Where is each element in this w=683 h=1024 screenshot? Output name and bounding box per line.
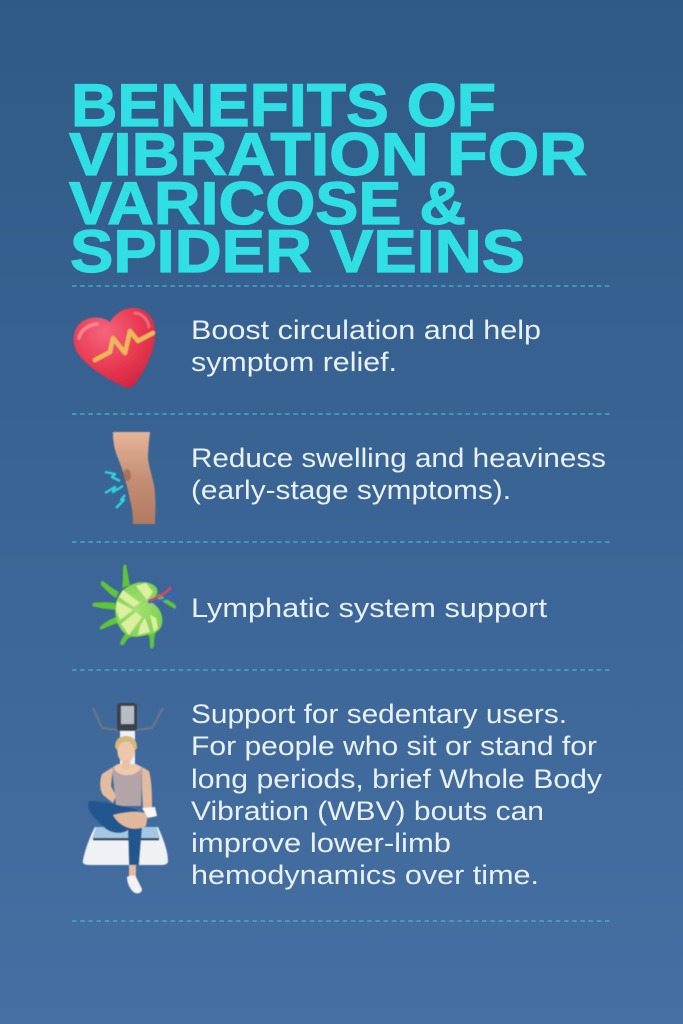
icon: heart with pulse line xyxy=(74,308,155,388)
title: VARICOSE & xyxy=(69,169,466,237)
text: sedentary users: improve lower-limb xyxy=(191,828,451,858)
title: BENEFITS OF xyxy=(71,71,496,139)
text: sedentary users: long periods, brief Whole Body xyxy=(191,764,603,794)
text: reduce swelling: Reduce swelling and heaviness xyxy=(191,443,606,473)
title xyxy=(69,71,587,285)
text: boost circulation xyxy=(191,315,541,377)
text: lymphatic support: Lymphatic system support xyxy=(191,593,548,623)
text: sedentary users: Support for sedentary users. xyxy=(191,699,567,729)
text: sedentary users: For people who sit or stand for xyxy=(191,731,597,761)
title: VIBRATION FOR xyxy=(69,120,587,188)
icon: leg with veins and pain marks xyxy=(105,432,155,524)
text: boost circulation: Boost circulation and help xyxy=(191,315,541,345)
title: SPIDER VEINS xyxy=(70,217,525,285)
text: sedentary users: Vibration (WBV) bouts can xyxy=(191,796,544,826)
icon: woman seated on vibration plate xyxy=(83,703,168,893)
icon: lymph node xyxy=(92,564,176,649)
text: reduce swelling: (early-stage symptoms). xyxy=(191,475,511,505)
text: reduce swelling xyxy=(191,443,606,505)
text: boost circulation: symptom relief. xyxy=(191,347,397,377)
text: sedentary users: hemodynamics over time. xyxy=(191,860,539,890)
text: sedentary users xyxy=(191,699,603,890)
